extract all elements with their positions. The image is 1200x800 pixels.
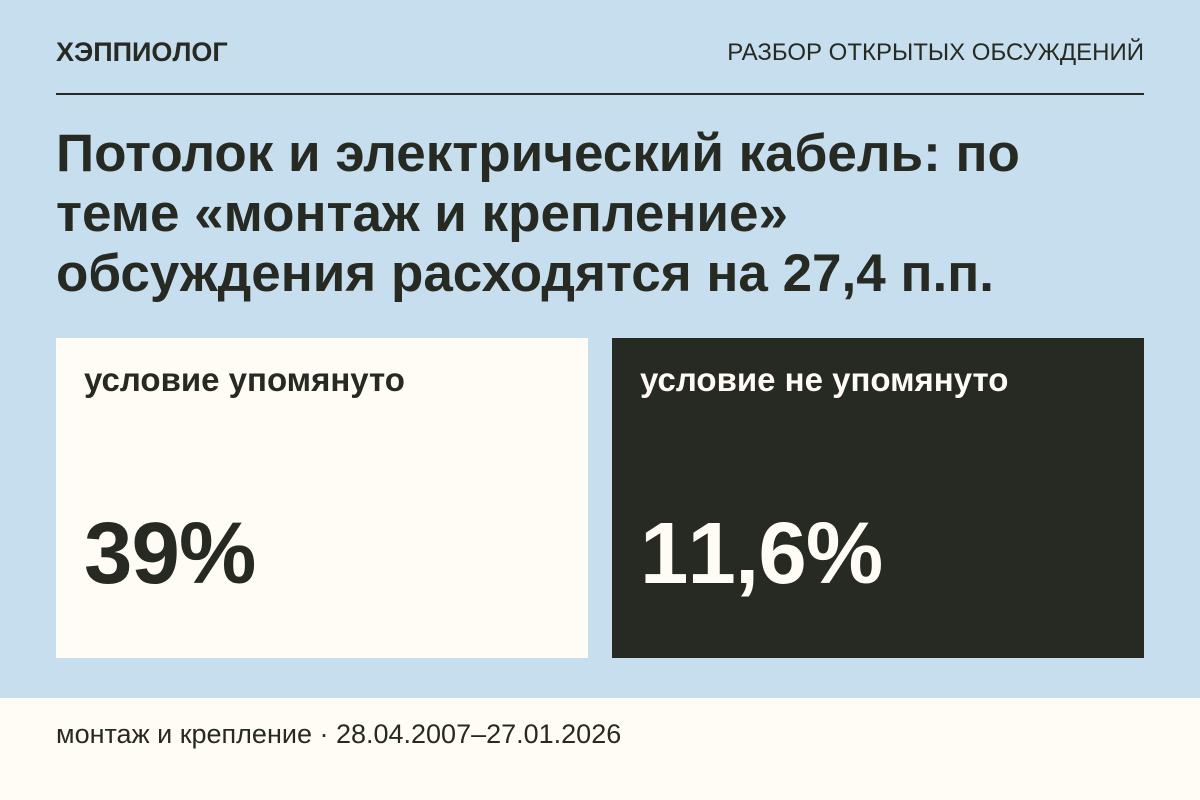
brand name: ХЭППИОЛОГ bbox=[56, 37, 228, 67]
title: обсуждения расходятся на 27,4 п.п. bbox=[56, 244, 994, 303]
panel label: not mentioned: условие не упомянуто bbox=[640, 361, 1008, 398]
title: теме «монтаж и крепление» bbox=[56, 184, 788, 243]
footer text: монтаж и крепление · 28.04.2007–27.01.2026 bbox=[56, 719, 621, 749]
panel label: mentioned: условие упомянуто bbox=[84, 361, 405, 398]
value: 39%: 39% bbox=[84, 505, 256, 602]
panel: condition mentioned bbox=[56, 338, 588, 658]
value: 11,6%: 11,6% bbox=[640, 505, 882, 602]
panel: condition not mentioned bbox=[612, 338, 1144, 658]
title: Потолок и электрический кабель: по bbox=[56, 124, 1020, 183]
header caption: РАЗБОР ОТКРЫТЫХ ОБСУЖДЕНИЙ bbox=[727, 39, 1144, 66]
footer band bbox=[0, 698, 1200, 800]
title bbox=[56, 124, 1020, 303]
